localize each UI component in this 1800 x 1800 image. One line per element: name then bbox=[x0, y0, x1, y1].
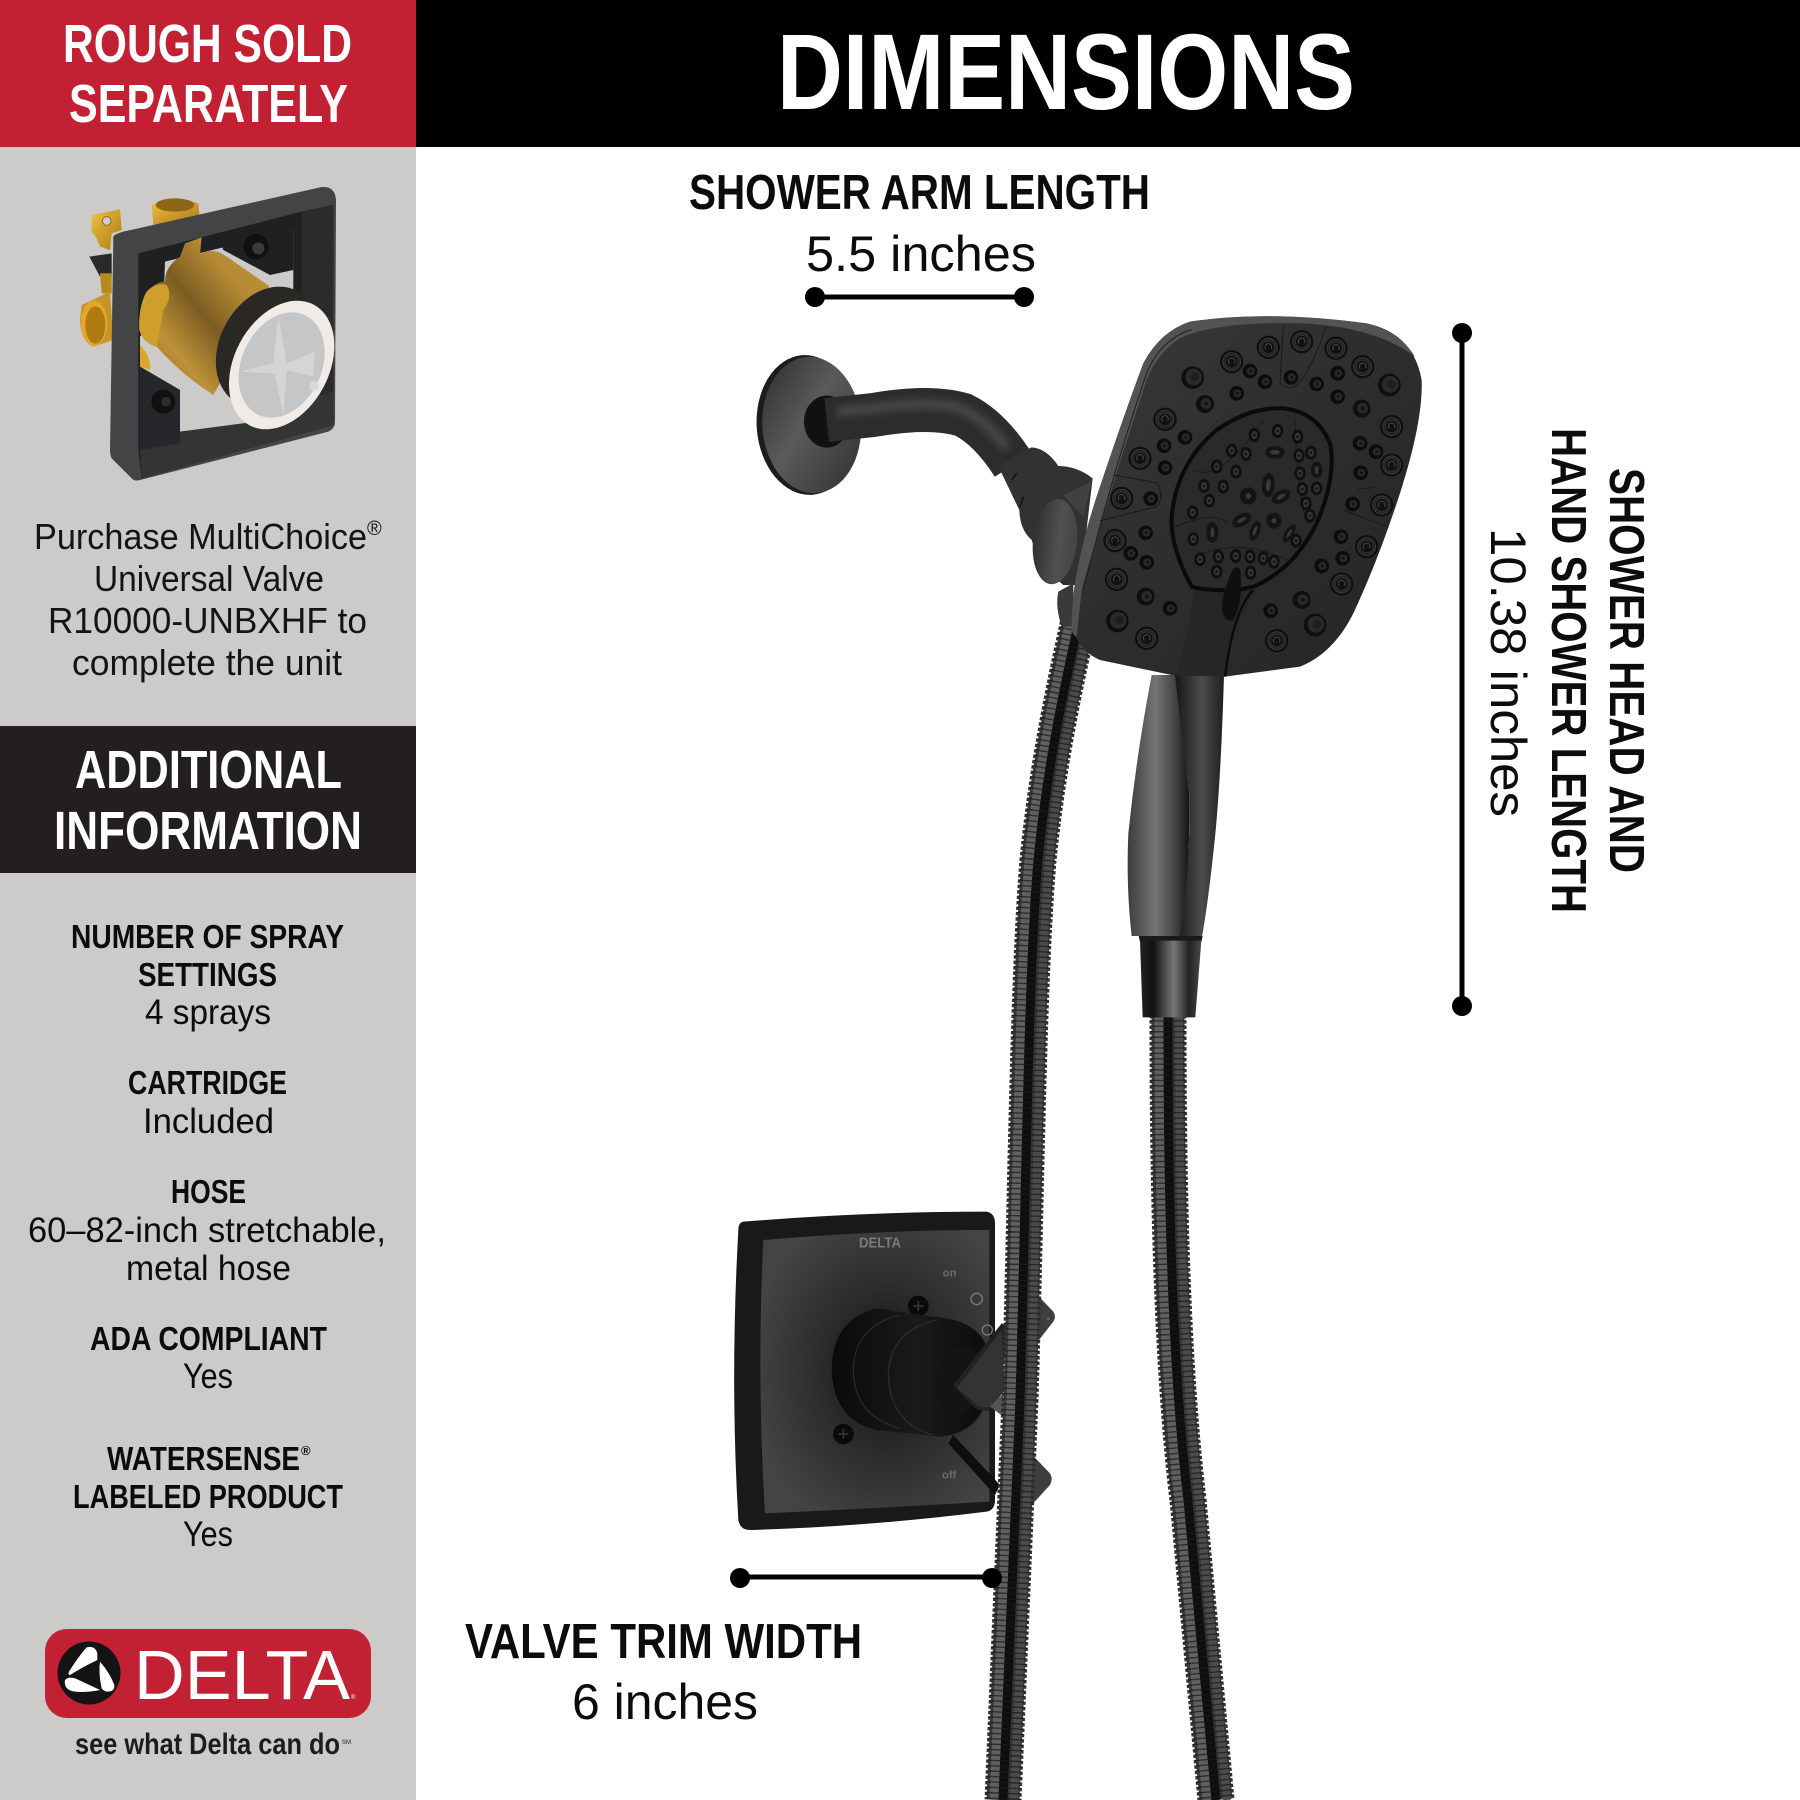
dimension: shower arm length bbox=[689, 166, 1150, 307]
spec: cartridge: CARTRIDGE bbox=[128, 1064, 287, 1101]
valve handle wings behind hose bbox=[1032, 1293, 1055, 1505]
dimension: shower arm length: SHOWER ARM LENGTH bbox=[689, 166, 1150, 220]
heading: additional information: INFORMATION bbox=[54, 801, 362, 861]
text: purchase multichoice note: complete the unit bbox=[72, 642, 342, 683]
red banner: rough sold separately bbox=[0, 0, 416, 147]
dimension: valve trim width: VALVE TRIM WIDTH bbox=[465, 1615, 862, 1669]
red banner: rough sold separately: SEPARATELY bbox=[69, 74, 348, 134]
spray lever bbox=[1222, 567, 1241, 621]
dimension: valve trim width bbox=[465, 1568, 1002, 1730]
dimension: shower head and hand shower length bbox=[1452, 323, 1653, 1016]
spec: number of spray settings bbox=[71, 918, 344, 1032]
black banner: dimensions title bbox=[416, 0, 1800, 147]
shower arm and flange bbox=[752, 352, 1093, 627]
centre spray petals bbox=[1206, 446, 1322, 544]
delta logo: DELTA bbox=[134, 1636, 350, 1714]
valve trim plate with handle bbox=[734, 1212, 1008, 1530]
dimension: shower head and hand shower length: 10.38 inches bbox=[1480, 528, 1536, 817]
dimension: shower head and hand shower length: HAND SHOWER LENGTH bbox=[1541, 428, 1595, 913]
valve trim plate with handle: on bbox=[943, 1268, 957, 1280]
left grey panel bbox=[0, 0, 416, 1800]
spec: watersense labeled product bbox=[73, 1440, 343, 1554]
spec: cartridge: Included bbox=[143, 1102, 274, 1141]
black banner: dimensions title: DIMENSIONS bbox=[777, 11, 1355, 132]
delta logo: SM bbox=[342, 1740, 351, 1746]
spec: ada compliant: Yes bbox=[183, 1357, 233, 1396]
text: purchase multichoice note: Universal Valve bbox=[94, 558, 324, 599]
brass valve body bbox=[139, 237, 269, 395]
right hose run bbox=[1159, 1015, 1227, 1800]
centre spray nozzles bbox=[1187, 424, 1322, 580]
centre spray face bbox=[1172, 408, 1332, 590]
valve cap bbox=[196, 269, 338, 424]
valve trim plate with handle: DELTA bbox=[859, 1236, 901, 1252]
text: purchase multichoice note bbox=[34, 516, 382, 683]
text: purchase multichoice note: Purchase MultiChoice bbox=[34, 516, 367, 557]
spec: cartridge bbox=[128, 1064, 287, 1141]
flexible hose bbox=[994, 625, 1227, 1800]
hand shower handle and ferrule bbox=[1128, 675, 1224, 1017]
left hose run bbox=[994, 625, 1089, 1800]
text: purchase multichoice note: ® bbox=[367, 518, 382, 540]
spec: number of spray settings: 4 sprays bbox=[145, 993, 271, 1032]
delta logo: see what Delta can do bbox=[75, 1728, 340, 1761]
spec: watersense labeled product: Yes bbox=[183, 1515, 233, 1554]
delta logo: ® bbox=[351, 1694, 356, 1701]
heading: additional information: ADDITIONAL bbox=[75, 740, 342, 800]
logo triangle mark bbox=[65, 1647, 114, 1692]
valve mounting frame bbox=[110, 187, 336, 481]
spec: hose bbox=[28, 1173, 386, 1288]
dimension: valve trim width: 6 inches bbox=[572, 1674, 758, 1730]
image: universal rough valve bbox=[80, 187, 356, 481]
spec: hose: HOSE bbox=[171, 1173, 246, 1210]
text: purchase multichoice note: R10000-UNBXHF to bbox=[48, 600, 367, 641]
spec: ada compliant bbox=[90, 1320, 327, 1396]
dimension: shower arm length: 5.5 inches bbox=[806, 226, 1036, 282]
head body bbox=[1072, 316, 1422, 677]
spec: hose: 60–82-inch stretchable, bbox=[28, 1211, 386, 1250]
hand shower neck bbox=[1177, 583, 1257, 677]
spec: number of spray settings: SETTINGS bbox=[138, 956, 277, 993]
spec: number of spray settings: NUMBER OF SPRAY bbox=[71, 918, 344, 955]
spec: ada compliant: ADA COMPLIANT bbox=[90, 1320, 327, 1357]
spec: hose: metal hose bbox=[126, 1249, 291, 1288]
valve trim plate with handle: off bbox=[942, 1469, 957, 1481]
shower head bbox=[1071, 316, 1422, 677]
red banner: rough sold separately: ROUGH SOLD bbox=[63, 14, 352, 74]
outer nozzles bbox=[1103, 330, 1403, 652]
delta logo bbox=[45, 1629, 371, 1761]
heading: additional information bbox=[0, 726, 416, 873]
spec: watersense labeled product: ® bbox=[301, 1443, 311, 1458]
spec: watersense labeled product: LABELED PRODUCT bbox=[73, 1478, 343, 1515]
dimension: shower head and hand shower length: SHOWER HEAD AND bbox=[1599, 468, 1653, 873]
spec: watersense labeled product: WATERSENSE bbox=[107, 1440, 300, 1477]
